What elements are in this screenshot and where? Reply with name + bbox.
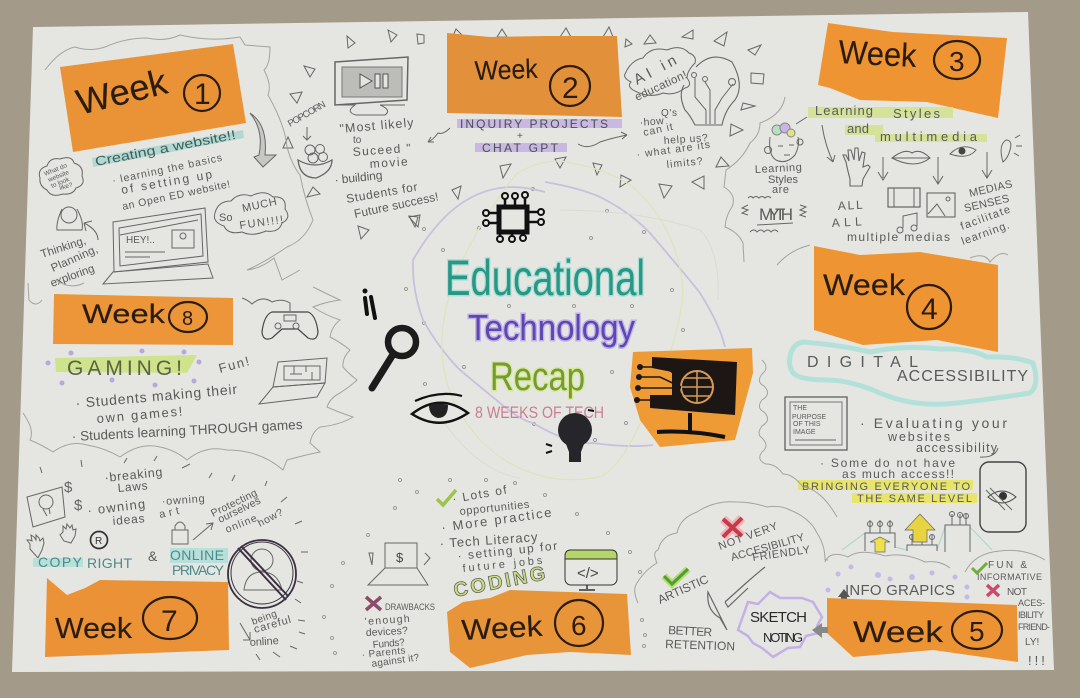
icon: magnifier — [372, 328, 416, 388]
panel: week 3: learning. — [960, 219, 1011, 248]
panel: week 7: RIGHT — [87, 555, 132, 571]
panel: week 6: · Lots of — [451, 483, 508, 506]
icon: code window: </> — [577, 565, 599, 582]
cloud: so much fun: FUN!!!! — [239, 214, 284, 232]
heading: week 8: Week — [82, 299, 166, 329]
panel: central title — [445, 250, 645, 422]
badge: number 4: 4 — [921, 293, 938, 326]
panel: week 2: can it — [642, 121, 674, 139]
panel: sketchnoting: FRIENDLY — [752, 544, 812, 564]
title: technology: Technology — [468, 307, 635, 348]
panel: week 3: facilitate — [959, 204, 1012, 233]
orange tape: week 7 — [45, 578, 229, 657]
panel: week 1: of setting up — [120, 167, 213, 197]
panel: week 2: + — [517, 131, 523, 142]
panel: sketchnoting: NOT VERY — [717, 520, 780, 553]
panel: movie notes: Suceed " — [352, 141, 411, 159]
heading: week 1: Week — [72, 60, 172, 123]
icon: framed idea — [27, 487, 65, 527]
panel: week 4: THE SAME LEVEL — [857, 493, 972, 505]
panel: week 6 — [361, 483, 631, 670]
panel: movie notes: "Most likely — [339, 116, 415, 136]
panel: week 5: INFORMATIVE — [977, 572, 1042, 582]
panel: week 1: Creating a website!! — [94, 127, 237, 169]
badge: number 6: 6 — [571, 610, 587, 641]
panel: week 4: BRINGING EVERYONE TO — [802, 481, 970, 493]
heading: week 7: Week — [55, 613, 133, 645]
title: educational: Educational — [445, 250, 645, 306]
panel: week 6: against it? — [371, 652, 420, 670]
digital accessibility banner: DIGITAL — [807, 354, 918, 371]
icons: brush and pen — [708, 567, 765, 630]
panel: week 4: websites — [887, 430, 950, 444]
panel: week 7: ourselves — [216, 495, 263, 526]
panel: week 5: !!! — [1028, 653, 1048, 668]
panel: week 5: FUN & — [988, 560, 1027, 571]
icons: media — [888, 188, 955, 233]
panel: movie notes: POPCORN — [286, 99, 328, 130]
panel: week 7: ideas — [112, 511, 145, 528]
icon: thinking person — [57, 207, 98, 240]
panel: week 3: SENSES — [963, 193, 1010, 215]
panel: week 6: · setting up for — [457, 539, 558, 563]
heading: week 4: Week — [823, 269, 906, 302]
badge: number 4 — [907, 285, 951, 329]
scattered small circles — [322, 188, 684, 654]
badge: number 2 — [550, 66, 590, 106]
title: recap: Recap — [490, 355, 585, 399]
arrow: down — [250, 113, 276, 167]
panel: week 2 — [428, 33, 739, 171]
panel: week 6: CODING — [452, 563, 547, 602]
panel: week 1: an Open ED website! — [121, 178, 231, 213]
heading: week 3: Week — [838, 33, 918, 74]
panel: week 1: · learning the basics — [111, 152, 223, 187]
panel: week 3: and — [847, 121, 869, 136]
panel: week 5: IBILITY — [1018, 610, 1044, 620]
panel: week 3: multimedia — [880, 129, 978, 144]
orange tape: week 4 — [814, 246, 998, 352]
panel: sketchnoting: RETENTION — [665, 637, 735, 653]
badge: number 3: 3 — [949, 46, 965, 77]
panel: movie notes: Students for — [345, 180, 418, 206]
heading: week 6: Week — [461, 611, 544, 647]
icons: senses — [843, 135, 1022, 186]
orange tape: week 8 — [53, 294, 233, 345]
panel: week 6: Funds? — [372, 637, 406, 651]
panel: week 6: · Parents — [361, 645, 406, 661]
badge: number 6 — [555, 600, 603, 646]
panel: week 6: · More practice — [440, 505, 552, 535]
panel: week 1 — [39, 35, 313, 290]
orange tape: week 6 — [447, 590, 631, 668]
panel: week 6: 'enough — [364, 613, 410, 628]
panel: week 7: ONLINE — [170, 547, 224, 563]
orange tape: week 2 — [447, 33, 622, 117]
panel: sketchnoting — [635, 360, 837, 657]
central swirl lines — [413, 161, 725, 480]
badge: number 7: 7 — [161, 605, 178, 638]
panel: week 2: help us? — [663, 132, 708, 147]
badge: number 1: 1 — [194, 78, 211, 111]
badge: number 2: 2 — [562, 72, 579, 105]
panel: movie notes: to — [353, 135, 362, 146]
icon: framed image: PURPOSE — [792, 414, 827, 421]
icon: laptop with dollar: $ — [396, 550, 404, 565]
panel: week 7: online — [249, 635, 279, 649]
panel: week 7: ·breaking — [104, 465, 163, 485]
icon: laptop with website — [103, 208, 213, 284]
panel: week 4: · Evaluating your — [860, 415, 1007, 431]
illustration: equal level podiums — [842, 512, 992, 552]
icon: no person symbol — [228, 540, 296, 608]
icon: circuit light bulb head — [681, 57, 739, 125]
cloud: so much fun — [214, 193, 288, 234]
panel: week 7: being — [250, 609, 278, 628]
icon: framed image: OF THIS — [793, 421, 821, 428]
badge: number 5: 5 — [969, 616, 985, 647]
panel: week 7: & — [148, 548, 158, 564]
icon: globe monitor — [630, 348, 753, 447]
panel: week 5: LY! — [1025, 637, 1039, 648]
thought cloud: What do — [43, 162, 69, 178]
orange tape: week 5 — [827, 598, 1018, 662]
panel: movie notes: Future success! — [353, 189, 440, 221]
thought cloud: to look — [50, 176, 71, 190]
digital accessibility banner — [789, 342, 1036, 404]
panel: week 6: devices? — [366, 625, 408, 639]
panel: movie notes — [286, 57, 440, 221]
icon: phone with eye — [980, 462, 1026, 532]
panel: week 2: Q's — [661, 108, 677, 119]
thought cloud: website — [46, 169, 71, 184]
panel: week 6: · Tech Literacy — [439, 529, 538, 551]
cloud: so much fun: So — [219, 212, 232, 224]
panel: week 2: CHAT GPT — [482, 141, 559, 155]
panel: week 4: as much access!! — [842, 467, 954, 481]
panel: week 5: FRIEND- — [1018, 622, 1050, 632]
orange tape: week 1 — [60, 44, 246, 152]
panel: week 3: Styles — [768, 174, 798, 186]
badge: number 5 — [952, 611, 1002, 649]
heading: week 2: Week — [474, 54, 539, 86]
panel: week 7: art — [158, 505, 180, 521]
thought cloud — [39, 158, 83, 195]
gaming banner — [46, 348, 202, 388]
panel: week 4: · Some do not have — [820, 456, 955, 470]
icon: game controller — [242, 298, 318, 339]
badge: number 8 — [169, 302, 207, 332]
panel: week 3: are — [772, 184, 789, 196]
panel: week 3: multiple medias — [847, 230, 950, 244]
icon: registered mark — [90, 532, 108, 548]
panel: week 1: exploring — [49, 263, 96, 290]
cloud: AI in education — [625, 48, 695, 104]
panel: week 3: MEDIAS — [968, 178, 1014, 200]
panel: week 3: Learning — [815, 103, 873, 118]
icon: head with brain — [764, 117, 807, 162]
callout: sketch noting badge: NOTING — [763, 630, 803, 645]
icon: laptop with dollar — [368, 543, 430, 585]
panel: week 2: · what are its — [636, 139, 711, 161]
badge: number 1 — [184, 75, 220, 111]
icon: framed image: THE — [793, 405, 807, 412]
panel: week 6: opportunities — [459, 499, 530, 518]
panel: week 7: online — [224, 512, 259, 536]
panel: week 6: DRAWBACKS — [385, 602, 435, 612]
panel: week 7: $ — [74, 497, 83, 514]
panel: week 3: Styles — [893, 106, 940, 121]
panel: week 7: Protecting — [209, 487, 259, 520]
callout: myth: MYTH — [759, 205, 793, 224]
panel: week 4 — [785, 246, 1036, 552]
icon: green check — [664, 569, 688, 584]
panel: movie notes: movie — [369, 154, 408, 171]
icon: red cross — [723, 518, 742, 537]
icon: drawbacks cross — [366, 597, 381, 610]
panel: week 8: · Students learning THROUGH games — [71, 417, 303, 444]
digital accessibility banner: ACCESSIBILITY — [897, 368, 1028, 385]
cloud: so much fun: MUCH — [241, 196, 278, 215]
panel: week 5: ACES- — [1018, 598, 1045, 608]
callout: sketch noting badge — [738, 592, 828, 657]
panel: week 2: ·how — [639, 115, 665, 129]
icon: popcorn bowl — [298, 127, 332, 178]
badge: number 7 — [143, 597, 197, 639]
info graphics heading — [826, 564, 970, 601]
panel: week 8: own games! — [96, 404, 183, 426]
panel: week 8 — [23, 280, 357, 470]
panel: sketchnoting: ARTISTIC — [656, 572, 711, 607]
panel: week 7: $ — [64, 479, 73, 496]
badge: number 3 — [934, 41, 980, 79]
panel: week 7: PRIVACY — [172, 562, 225, 578]
panel: week 3: ALL — [837, 198, 863, 213]
panel: week 2: limits? — [666, 155, 703, 171]
icon: code window — [565, 550, 617, 590]
icon: eye — [412, 394, 468, 423]
badge: number 8: 8 — [182, 308, 193, 330]
icon: registered mark: R — [95, 536, 102, 547]
icon: pencil marks — [362, 288, 375, 318]
gaming banner: GAMING! — [67, 357, 182, 380]
panel: week 5 — [825, 550, 1050, 668]
panel: sketchnoting: BETTER — [668, 623, 713, 639]
heading: week 5: Week — [853, 616, 944, 649]
panel: week 8: · Students making their — [75, 381, 238, 411]
panel: week 4: accessibility — [916, 441, 998, 455]
panel: week 7: · owning — [87, 496, 146, 518]
panel: week 3: Learning — [755, 162, 802, 176]
panel: week 7: careful — [253, 614, 292, 636]
panel: week 3: ALL — [831, 214, 862, 230]
icon: framed image — [785, 397, 847, 450]
callout: myth — [742, 196, 806, 232]
panel: movie notes: · building — [334, 168, 383, 187]
icon: framed image: IMAGE — [793, 429, 816, 436]
panel: week 6: future jobs — [462, 555, 543, 575]
panel: week 8: Fun! — [217, 353, 251, 376]
orange tape: week 3 — [818, 23, 1007, 118]
panel: week 7: COPY — [38, 554, 83, 570]
icons: hands and lock — [27, 522, 213, 558]
subtitle: 8 WEEKS OF TECH — [475, 403, 604, 422]
callout: sketch noting badge: SKETCH — [750, 609, 807, 626]
cloud: AI in education: education! — [633, 69, 689, 104]
panel: week 7: ·owning — [161, 493, 205, 508]
panel: week 5: NOT — [1007, 587, 1027, 598]
icon: circuit chip — [483, 192, 544, 242]
panel: week 1: Thinking, — [39, 235, 88, 261]
icon: video monitor — [335, 57, 408, 115]
panel: week 7: Laws — [117, 478, 148, 495]
panel: week 1: Planning, — [49, 243, 100, 275]
thought cloud: like? — [59, 182, 74, 192]
panel: week 7 — [27, 456, 308, 660]
panel: week 2: INQUIRY PROJECTS — [460, 117, 608, 131]
info graphics heading: INFO GRAPICS — [845, 582, 955, 599]
scattered triangle doodles — [283, 27, 764, 239]
icon: laptop with game — [259, 358, 327, 404]
cloud: AI in education: AI in — [631, 52, 679, 89]
icon: laptop with website: HEY!.. — [126, 235, 155, 246]
panel: week 3 — [724, 23, 1022, 265]
icon: light bulb — [546, 410, 594, 462]
panel: sketchnoting: ACCESIBILITY — [730, 531, 807, 564]
panel: week 7: how? — [256, 506, 285, 530]
